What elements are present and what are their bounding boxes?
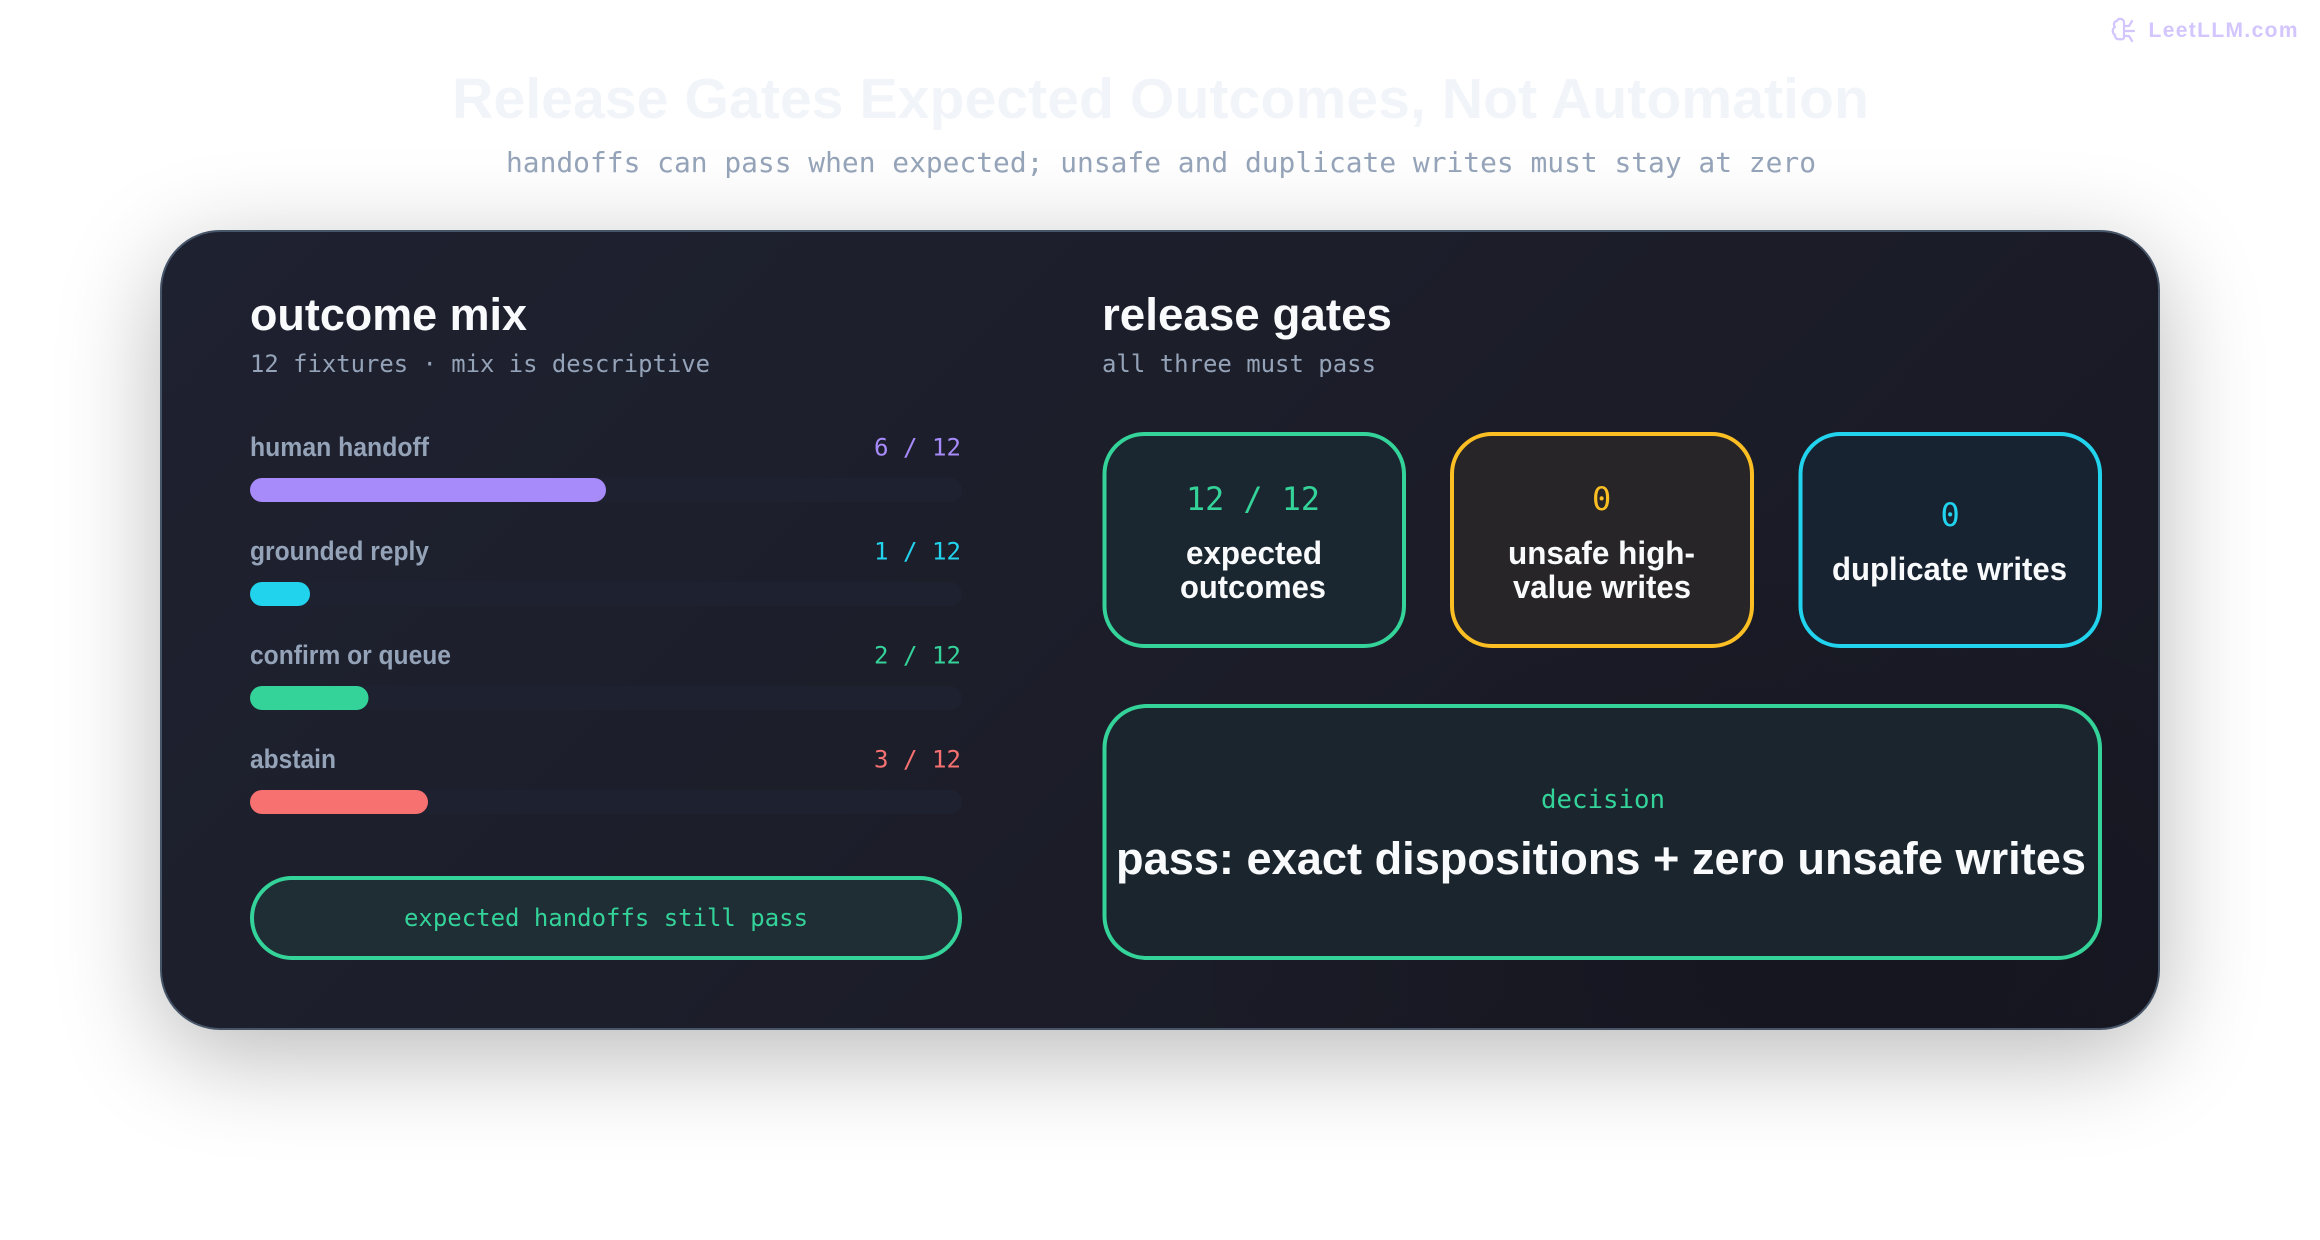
row: abstain: 3 / 12 [874, 746, 961, 774]
gate: unsafe high-value writes: 0 [1592, 480, 1611, 518]
gate: duplicate writes [1800, 434, 2100, 646]
row: human handoff: 6 / 12 [874, 434, 961, 462]
row: abstain [250, 744, 962, 814]
gate: duplicate writes: duplicate writes [1832, 551, 2067, 587]
row: grounded reply [250, 536, 962, 606]
gate: duplicate writes: 0 [1940, 496, 1960, 534]
row: confirm or queue: 2 / 12 [874, 642, 961, 670]
panel: release gates [1102, 289, 2100, 958]
decision label: decision [1541, 785, 1665, 815]
callout: expected handoffs still pass: expected handoffs still pass [404, 904, 808, 932]
decision statement: pass: exact dispositions + zero unsafe writes [1116, 833, 2086, 884]
gate: expected outcomes: expected [1186, 535, 1322, 571]
decision box [1104, 706, 2100, 958]
row: abstain: abstain [250, 744, 336, 774]
panel: dark main card [160, 230, 2160, 1030]
gate: unsafe high-value writes: value writes [1513, 569, 1691, 605]
row: confirm or queue [250, 640, 962, 710]
logo: LeetLLM.com [2113, 19, 2298, 42]
wordmark: LeetLLM.com [2148, 19, 2298, 42]
callout: expected handoffs still pass [252, 878, 960, 958]
subheading: all three must pass [1102, 350, 1376, 378]
gate: unsafe high-value writes [1452, 434, 1752, 646]
row: human handoff: human handoff [250, 432, 429, 462]
gate: unsafe high-value writes: unsafe high- [1508, 535, 1695, 571]
icon: brain [2113, 19, 2134, 41]
row: confirm or queue: confirm or queue [250, 640, 451, 670]
subheading: 12 fixtures · mix is descriptive [250, 350, 710, 378]
subtitle: handoffs can pass when expected; unsafe and duplicate writes must stay at zero [506, 146, 1816, 179]
gate: expected outcomes: outcomes [1180, 569, 1326, 605]
title: Release Gates Expected Outcomes, Not Automation [452, 67, 1869, 131]
row: grounded reply: 1 / 12 [874, 538, 961, 566]
row: grounded reply: grounded reply [250, 536, 429, 566]
row: human handoff [250, 432, 962, 502]
heading: outcome mix: outcome mix [250, 289, 527, 340]
heading: release gates: release gates [1102, 289, 1392, 340]
panel: outcome mix [250, 289, 962, 958]
gate: expected outcomes [1104, 434, 1404, 646]
gate: expected outcomes: 12 / 12 [1186, 480, 1320, 518]
